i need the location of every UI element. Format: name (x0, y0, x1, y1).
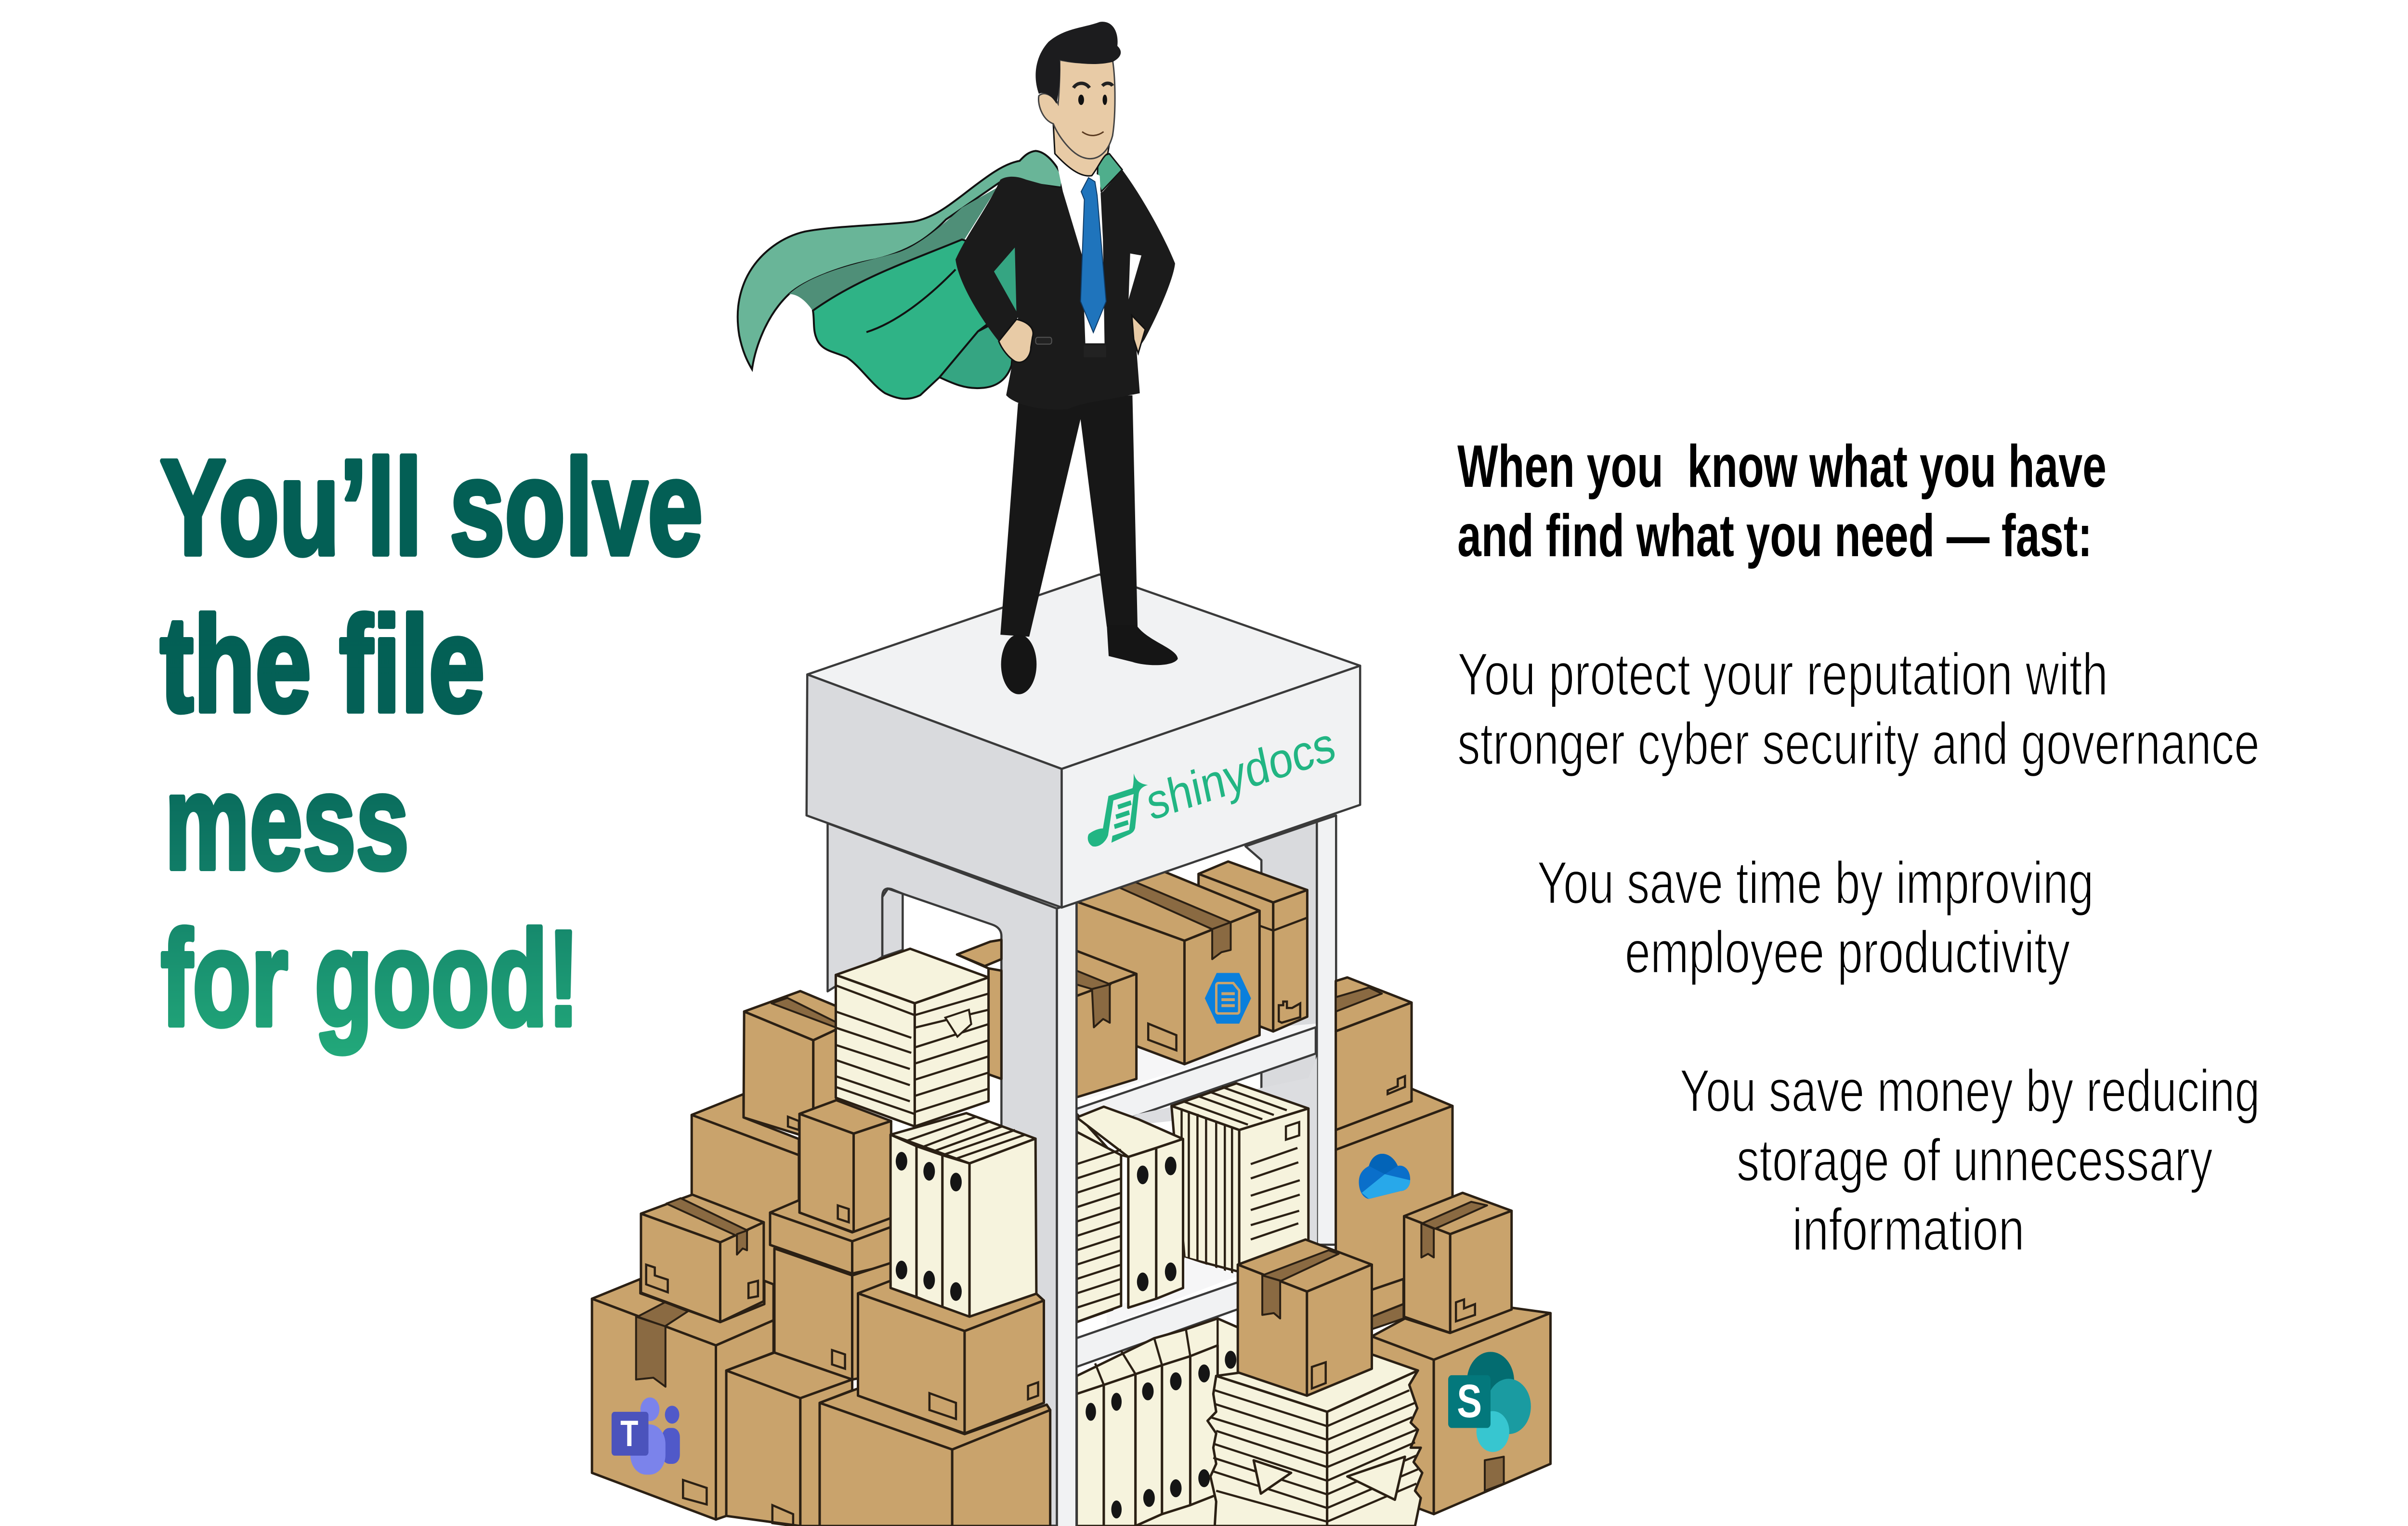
box front left (726, 1353, 852, 1526)
small right box (1404, 1193, 1512, 1333)
binder block (890, 1113, 1036, 1317)
platform top box (807, 574, 1360, 908)
left box pile (592, 949, 1050, 1526)
back left leg inner (882, 888, 903, 957)
hands (999, 315, 1145, 362)
hair (1035, 22, 1121, 104)
box centre tall (770, 1200, 891, 1380)
striped papers on middle shelf (1077, 1114, 1121, 1322)
narrow box on top shelf (1199, 861, 1307, 1031)
title: the file (160, 589, 485, 741)
box left upper back (744, 991, 837, 1139)
text block: lead statement: When you know what you have (1457, 433, 2107, 499)
cape (738, 151, 1122, 399)
front leg strip (1057, 901, 1076, 1526)
figure: businessman with cape (738, 22, 1175, 637)
large front box (820, 1388, 1050, 1526)
icon: file hexagon (1205, 973, 1251, 1024)
SharePoint letter: S (1457, 1375, 1482, 1427)
upper shelf (1076, 1024, 1316, 1136)
small left box (641, 1195, 764, 1322)
text block: save money: You save money by reducing (1680, 1057, 2260, 1124)
text block: protect reputation: You protect your reputation with (1457, 641, 2108, 707)
title: for good! (161, 903, 579, 1055)
tie (1081, 178, 1106, 333)
binders on bottom shelf (1077, 1318, 1242, 1526)
logo mark (1088, 773, 1148, 847)
box bottom right (1372, 1308, 1550, 1514)
logo wordmark: shinydocs (1141, 716, 1339, 831)
icon: SharePoint (1448, 1352, 1531, 1452)
paper stack upper left (836, 949, 989, 1126)
lower shelf (1076, 1257, 1242, 1367)
right strip (1317, 815, 1336, 1245)
text block: save time: You save time by improving (1537, 849, 2094, 916)
large box on top shelf (1076, 872, 1259, 1064)
text block: protect reputation (1457, 641, 2260, 777)
left side frame (827, 823, 1057, 1526)
box stacked centre (799, 1100, 891, 1232)
neck and face (1038, 60, 1115, 176)
leftmost box (592, 1279, 773, 1520)
title (160, 432, 703, 1055)
right front boxes and paper pile (1207, 1193, 1550, 1526)
trousers (1000, 395, 1138, 637)
middle and lower shelf contents (1076, 1056, 1317, 1526)
right outer boxes (1336, 978, 1453, 1329)
box left middle back (692, 1094, 799, 1322)
box under binders (858, 1281, 1044, 1434)
document stack on middle shelf (1172, 1083, 1309, 1274)
text block: lead statement: and find what you need — fast: (1457, 502, 2092, 569)
text block: lead statement (1457, 433, 2107, 569)
shoes (1001, 625, 1178, 694)
box right middle (1336, 1089, 1453, 1329)
icon: Microsoft Teams (612, 1397, 680, 1474)
text block: protect reputation: stronger cyber security and governance (1457, 710, 2260, 777)
box in front on top shelf (1076, 951, 1137, 1097)
shirt and jacket (955, 154, 1175, 409)
back panel below shelf (1104, 1056, 1317, 1257)
text block: save time (1537, 849, 2094, 985)
binders on middle shelf (1077, 1107, 1183, 1322)
box behind left leg (957, 940, 1001, 1079)
text block: save money: information (1792, 1196, 2025, 1263)
title: mess (165, 746, 409, 898)
icon: OneDrive (1359, 1154, 1410, 1199)
shelf frame back and upper shelf contents (827, 815, 1336, 1526)
box on paper pile (1238, 1239, 1372, 1396)
box right upper (1336, 978, 1412, 1130)
text block: save time: employee productivity (1625, 919, 2070, 985)
Teams letter: T (620, 1413, 638, 1454)
text block: save money (1680, 1057, 2260, 1263)
paper pile front (1207, 1355, 1422, 1526)
text block: save money: storage of unnecessary (1737, 1127, 2213, 1193)
back right panel (1245, 822, 1317, 1236)
title: You’ll solve (160, 432, 703, 584)
